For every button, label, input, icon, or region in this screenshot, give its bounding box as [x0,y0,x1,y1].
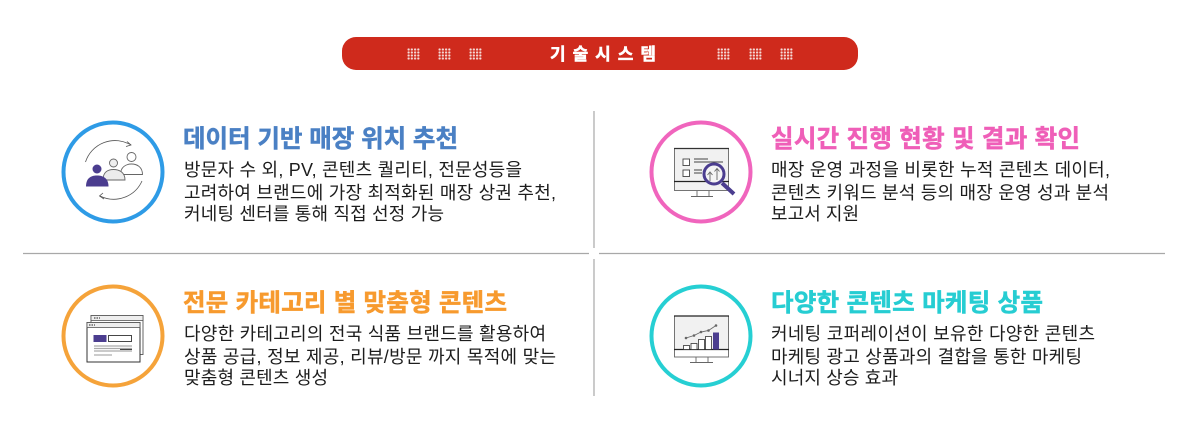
body text [771,324,1095,388]
divider lines [23,111,1165,396]
heading: 전문 카테고리 별 맞춤형 콘텐츠 [183,289,507,317]
body text: 고려하여 브랜드에 가장 최적화된 매장 상권 추천, [184,183,556,203]
body text: 커네팅 코퍼레이션이 보유한 다양한 콘텐츠 [771,324,1095,344]
body text: 커네팅 센터를 통해 직접 선정 가능 [184,204,444,224]
icon: rotating people [64,122,162,222]
body text: 보고서 지원 [771,204,859,224]
icon: monitor with magnifier [652,122,750,222]
body text [184,160,556,224]
heading: 데이터 기반 매장 위치 추천 [183,125,458,153]
panel: store location recommendation [64,122,556,224]
heading: 실시간 진행 현황 및 결과 확인 [771,125,1080,153]
panel: diverse content marketing [652,286,1095,388]
body text: 방문자 수 외, PV, 콘텐츠 퀄리티, 전문성등을 [184,160,522,180]
heading: 다양한 콘텐츠 마케팅 상품 [771,289,1043,317]
icon: browser windows [64,286,162,386]
body text [771,160,1110,224]
body text: 맞춤형 콘텐츠 생성 [184,368,328,388]
title banner [342,37,858,70]
body text: 시너지 상승 효과 [771,368,898,388]
body text: 매장 운영 과정을 비롯한 누적 콘텐츠 데이터, [771,160,1110,180]
panel: category custom content [64,286,556,388]
body text [184,324,556,388]
body text: 마케팅 광고 상품과의 결합을 통한 마케팅 [771,347,1082,367]
icon: monitor with bar chart [652,286,750,386]
body text: 콘텐츠 키워드 분석 등의 매장 운영 성과 분석 [771,183,1109,203]
body text: 다양한 카테고리의 전국 식품 브랜드를 활용하여 [184,324,546,344]
panel: real-time progress [652,122,1110,224]
title banner: 기술시스템 [550,45,656,64]
body text: 상품 공급, 정보 제공, 리뷰/방문 까지 목적에 맞는 [184,347,556,367]
